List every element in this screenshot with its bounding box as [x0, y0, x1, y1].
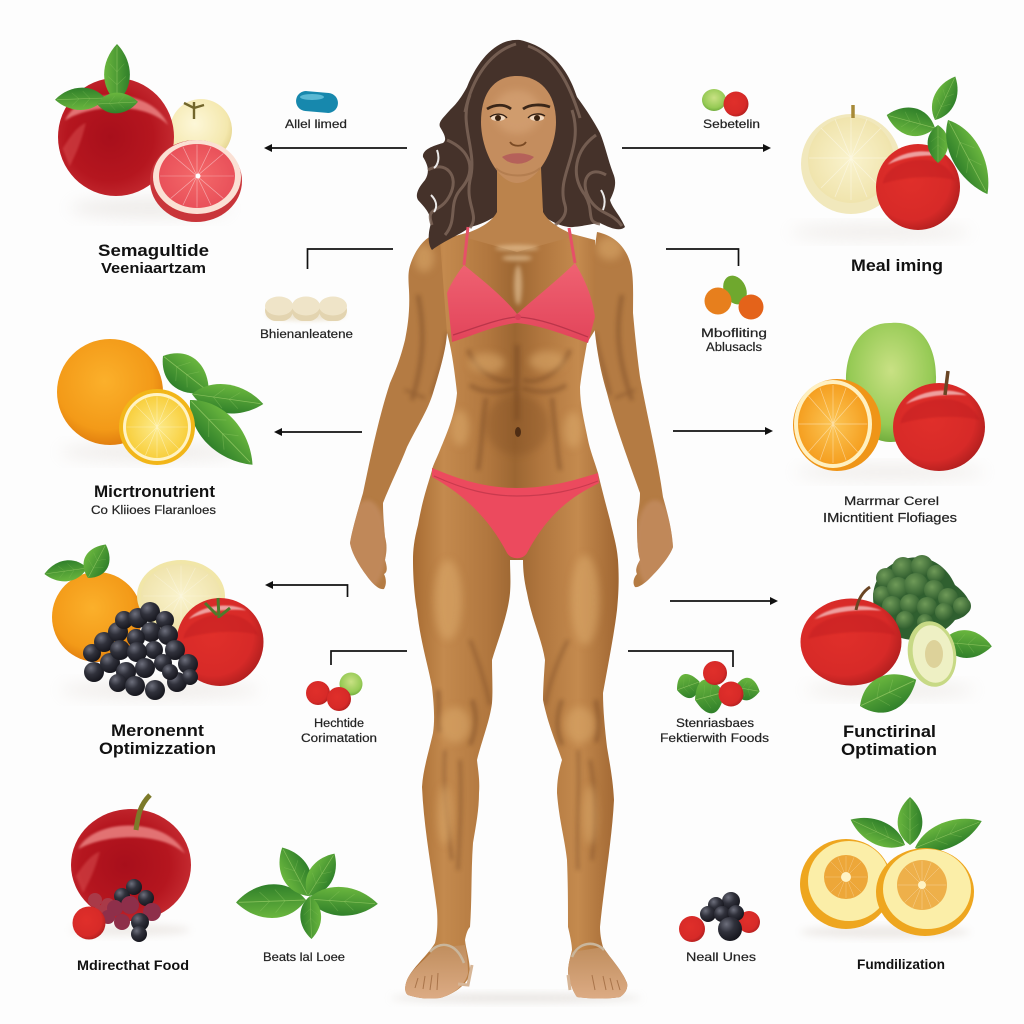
connector: elbow arrow lower-left — [265, 581, 348, 597]
label: Stenriasbaes — [660, 718, 769, 745]
heading: Semagultide: Semagultide — [98, 241, 209, 260]
arrow: top-right — [622, 144, 771, 152]
hair — [417, 40, 625, 250]
connector: elbow to cherries — [628, 651, 733, 667]
label: Marrmar Cerel — [823, 494, 957, 525]
icon: red apple — [893, 371, 985, 471]
arrow: capsule to left fruit — [264, 144, 407, 152]
label: Hechtide: Corimatation — [301, 733, 377, 745]
panel: bottom-left apple group — [70, 795, 191, 942]
icon: red apple — [876, 144, 960, 230]
heading: Functirinal Optimation: Optimation — [841, 740, 937, 759]
icon: red apple — [800, 587, 902, 686]
icon: small berries — [679, 892, 760, 942]
heading: Meronennt Optimization: Meronennt — [111, 722, 205, 740]
chest highlight — [495, 245, 539, 305]
label: Stenriasbaes: Fektierwith Foods — [660, 733, 769, 745]
label: Marrmar Cerel: IMicntitient Flofiages — [823, 511, 957, 525]
icon: basil leaves — [235, 841, 379, 939]
icon: citrus half left — [800, 839, 892, 929]
icon: red apple — [176, 598, 264, 686]
heading: Micronutrient: Micrtronutrient — [94, 483, 216, 501]
figure: woman — [347, 40, 675, 1003]
arrow: lower-right — [670, 597, 778, 605]
heading: Micronutrient: Co Kliioes Flaranloes — [91, 505, 216, 517]
face — [481, 76, 556, 183]
navel — [515, 427, 521, 437]
icon: blackberries — [83, 602, 198, 700]
muscle shading — [405, 295, 635, 870]
panel: top-left fruit group — [55, 44, 242, 222]
icon: berries — [72, 879, 161, 942]
label: Hechtide — [301, 718, 377, 745]
icon: leaf behind slice — [941, 628, 993, 660]
label: tablets: Bhienanleatene — [260, 329, 353, 341]
icon: red apple — [71, 795, 191, 921]
torso and legs — [405, 232, 627, 999]
arrow: middle-left — [274, 428, 362, 436]
icon: grapefruit half — [150, 140, 242, 222]
heading: Semagultide — [98, 241, 209, 277]
label: Sebetelin: Sebetelin — [703, 117, 760, 131]
heading: Meal iming: Meal iming — [851, 257, 943, 275]
bikini bottom — [432, 468, 599, 558]
icon: small green and red fruit — [702, 89, 748, 116]
icon: small cherries with green fruit — [306, 672, 362, 711]
icon: tablets — [265, 296, 347, 321]
icon: orange with leaves — [43, 539, 142, 662]
icon: lemon slice — [119, 389, 195, 465]
hands tint — [347, 500, 675, 590]
icon: leaf front — [852, 664, 924, 722]
icon: cucumber slice — [903, 617, 961, 691]
icon: pale lemon — [801, 105, 901, 214]
connector: elbow to tablets — [308, 249, 393, 269]
label: Fumdilization: Fumdilization — [857, 956, 945, 972]
icon: green apple — [846, 323, 936, 442]
heading: Semagultide: Veeniaartzam — [101, 261, 206, 277]
icon: orange — [57, 339, 163, 445]
label: Marrmar Cerel: Marrmar Cerel — [844, 494, 939, 508]
arm: left — [350, 235, 450, 589]
label: Stenriasbaes: Stenriasbaes — [676, 718, 754, 730]
heading: Micronutrient — [91, 483, 216, 517]
panel: top-right fruit group — [790, 72, 1001, 239]
label: Mbofliting: Ablusacls — [706, 342, 762, 354]
icon: broccoli — [873, 555, 971, 640]
connector: elbow to mixed fruit — [666, 249, 738, 266]
label: Hechtide: Hechtide — [314, 718, 364, 730]
icon: orange and green small fruit — [704, 272, 764, 320]
icon: leaves — [152, 342, 265, 477]
label: small berries: Neall Unes — [686, 950, 756, 964]
icon: leaves — [883, 72, 1001, 201]
panel: bottom-right citrus group — [800, 797, 987, 938]
icon: blue capsule — [295, 90, 339, 114]
heading: Meronennt Optimization: Optimizzation — [99, 740, 216, 758]
icon: leaves — [55, 44, 138, 114]
arrow: middle-right — [673, 427, 773, 435]
panel: middle-right fruit group — [793, 323, 985, 479]
panel: middle-left citrus group — [57, 339, 265, 477]
icon: citrus half right — [876, 848, 974, 936]
label: capsule: Allel limed — [285, 117, 347, 131]
heading: Meronennt Optimization — [99, 722, 216, 758]
abs shadow — [485, 395, 549, 455]
icon: cream apple — [170, 99, 232, 161]
label: Mbofliting: Mbofliting — [701, 328, 767, 340]
panel: lower-right fruit group — [800, 555, 993, 722]
heading: Functirinal Optimation: Functirinal — [843, 722, 936, 741]
arm: right — [590, 232, 673, 587]
label: Mbofliting — [701, 328, 767, 354]
heading: Functirinal Optimation — [841, 722, 937, 759]
icon: cherries with leaves — [673, 661, 762, 717]
icon: orange slice — [793, 379, 881, 471]
label: Mdirecthat Food: Mdirecthat Food — [77, 957, 189, 973]
neck — [460, 168, 575, 252]
connector: elbow to small cherries — [331, 651, 407, 665]
icon: lemon slice — [137, 560, 225, 632]
label: basil: Beats lal Loee — [263, 950, 345, 964]
icon: leaves — [846, 797, 987, 860]
feet — [405, 944, 627, 999]
bikini top — [447, 227, 595, 343]
icon: red apple — [58, 78, 174, 196]
panel: lower-left fruit group — [43, 539, 264, 700]
muscle highlights — [414, 236, 623, 845]
